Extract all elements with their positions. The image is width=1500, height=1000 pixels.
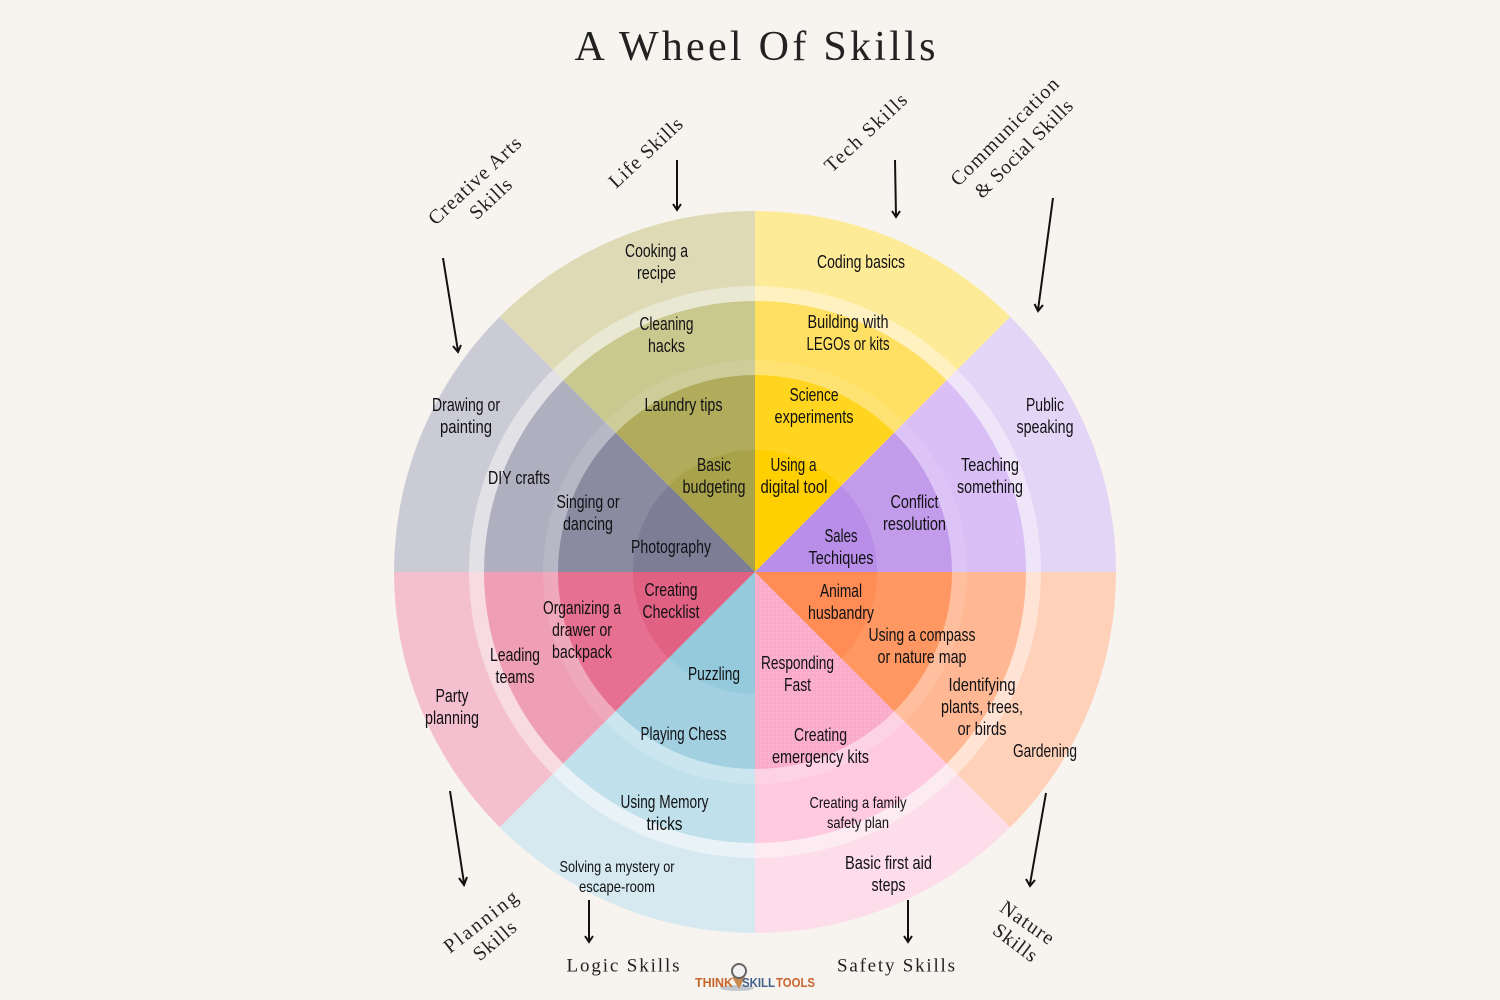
safety text: Creating a family	[810, 795, 906, 812]
logo wordmark: TOOLS	[776, 975, 815, 990]
tech skills text: LEGOs or kits	[806, 334, 890, 354]
life skills text: Laundry tips	[644, 395, 722, 415]
safety text: Fast	[784, 675, 811, 695]
communication text	[808, 395, 1074, 568]
label: nature skills: Nature	[996, 896, 1058, 950]
panel: planning skills sector	[394, 572, 754, 828]
creative arts text: dancing	[563, 514, 613, 534]
nature rings	[755, 572, 1116, 828]
label: creative arts skills: Skills	[465, 174, 517, 224]
logic text	[560, 664, 740, 896]
safety text: Basic first aid	[845, 853, 932, 873]
nature text: or nature map	[878, 647, 966, 667]
creative arts text	[432, 395, 711, 557]
nature text: Using a compass	[868, 625, 976, 645]
safety rings	[755, 572, 1010, 933]
planning text: planning	[425, 708, 479, 728]
communication text: Conflict	[890, 492, 938, 512]
logo icon	[720, 964, 754, 991]
arrow: nature skills	[1026, 793, 1046, 886]
logic text: escape-room	[579, 879, 655, 896]
planning text: drawer or	[552, 620, 612, 640]
arrow: creative arts skills	[443, 258, 461, 352]
arrow: tech skills	[892, 160, 900, 217]
safety text: Creating	[794, 725, 847, 745]
communication text: something	[957, 477, 1023, 497]
label: communication and social skills: Communication	[946, 73, 1064, 191]
communication text: Techiques	[808, 548, 874, 568]
tech skills text: digital tool	[760, 477, 828, 497]
safety text: safety plan	[827, 815, 889, 832]
creative arts rings	[394, 316, 755, 572]
safety text: emergency kits	[772, 747, 869, 767]
label: creative arts skills: Creative Arts	[424, 132, 526, 230]
label: communication and social skills: & Social Skills	[970, 95, 1078, 203]
planning text: Leading	[490, 645, 540, 665]
panel: safety skills sector	[755, 572, 1010, 933]
label: planning skills: Skills	[469, 916, 521, 965]
logic text: tricks	[646, 814, 682, 834]
safety text: steps	[872, 875, 906, 895]
communication text: speaking	[1016, 417, 1074, 437]
panel: creative arts skills sector	[394, 316, 755, 572]
logo wordmark: SKILL	[742, 975, 775, 990]
communication text: Teaching	[961, 455, 1019, 475]
life skills text: hacks	[648, 336, 685, 356]
nature text: Identifying	[948, 675, 1016, 695]
tech skills text: Building with	[808, 312, 888, 332]
creative arts text: Singing or	[556, 492, 620, 512]
planning text	[425, 580, 700, 728]
tech skills rings	[755, 211, 1010, 572]
creative arts text: Photography	[631, 537, 711, 557]
communication text: Sales	[824, 526, 858, 546]
logic text: Playing Chess	[640, 724, 726, 744]
logic text: Solving a mystery or	[560, 859, 675, 876]
arrow: logic skills	[585, 900, 593, 942]
planning text: Checklist	[642, 602, 700, 622]
planning rings	[394, 572, 754, 828]
planning text: backpack	[552, 642, 613, 662]
nature text: husbandry	[808, 603, 874, 623]
safety text	[761, 653, 932, 895]
label: nature skills: Skills	[988, 919, 1042, 967]
life skills rings	[500, 211, 755, 572]
arrow: safety skills	[904, 900, 912, 942]
tech skills text: Science	[790, 385, 838, 405]
life skills text	[625, 241, 746, 497]
panel: nature skills sector	[755, 572, 1116, 828]
label: safety skills: Safety Skills	[837, 956, 955, 976]
logo wordmark: THINK	[695, 975, 734, 990]
life skills text: Basic	[697, 455, 731, 475]
arrow: communication skills	[1034, 198, 1053, 311]
title: A Wheel Of Skills	[574, 24, 936, 70]
label: tech skills: Tech Skills	[820, 89, 912, 177]
panel: life skills sector	[500, 211, 755, 572]
nature text: Animal	[820, 581, 862, 601]
nature text: Gardening	[1013, 741, 1077, 761]
tech skills text: Using a	[770, 455, 817, 475]
communication text: resolution	[883, 514, 946, 534]
creative arts text: DIY crafts	[488, 468, 550, 488]
life skills text: budgeting	[682, 477, 746, 497]
communication text: Public	[1026, 395, 1064, 415]
tech skills text: experiments	[774, 407, 854, 427]
planning text: Party	[436, 686, 468, 706]
label: nature skills	[988, 896, 1058, 967]
panel: logic skills sector	[500, 572, 755, 933]
communication rings	[755, 317, 1116, 572]
creative arts text: painting	[440, 417, 492, 437]
safety text: Responding	[761, 653, 834, 673]
logic text: Puzzling	[688, 664, 740, 684]
panel: communication and social skills sector	[755, 317, 1116, 572]
label: logic skills: Logic Skills	[566, 956, 680, 976]
logo: think skill tools	[695, 964, 815, 991]
nature text	[808, 581, 1077, 761]
tech skills text: Coding basics	[817, 252, 905, 272]
logo wordmark	[695, 975, 815, 990]
logic text: Using Memory	[620, 792, 708, 812]
nature text: plants, trees,	[941, 697, 1023, 717]
logic rings	[500, 572, 755, 933]
planning text: Creating	[644, 580, 698, 600]
arrow: life skills	[673, 160, 681, 210]
life skills text: Cleaning	[640, 314, 694, 334]
planning text: Organizing a	[543, 598, 622, 618]
life skills text: Cooking a	[625, 241, 689, 261]
tech skills text	[760, 252, 905, 497]
panel: tech skills sector	[755, 211, 1010, 572]
life skills text: recipe	[637, 263, 676, 283]
nature text: or birds	[958, 719, 1006, 739]
arrow: planning skills	[450, 791, 467, 885]
planning text: teams	[496, 667, 534, 687]
creative arts text: Drawing or	[432, 395, 500, 415]
label: life skills: Life Skills	[604, 113, 688, 193]
label: planning skills: Planning	[440, 886, 522, 958]
